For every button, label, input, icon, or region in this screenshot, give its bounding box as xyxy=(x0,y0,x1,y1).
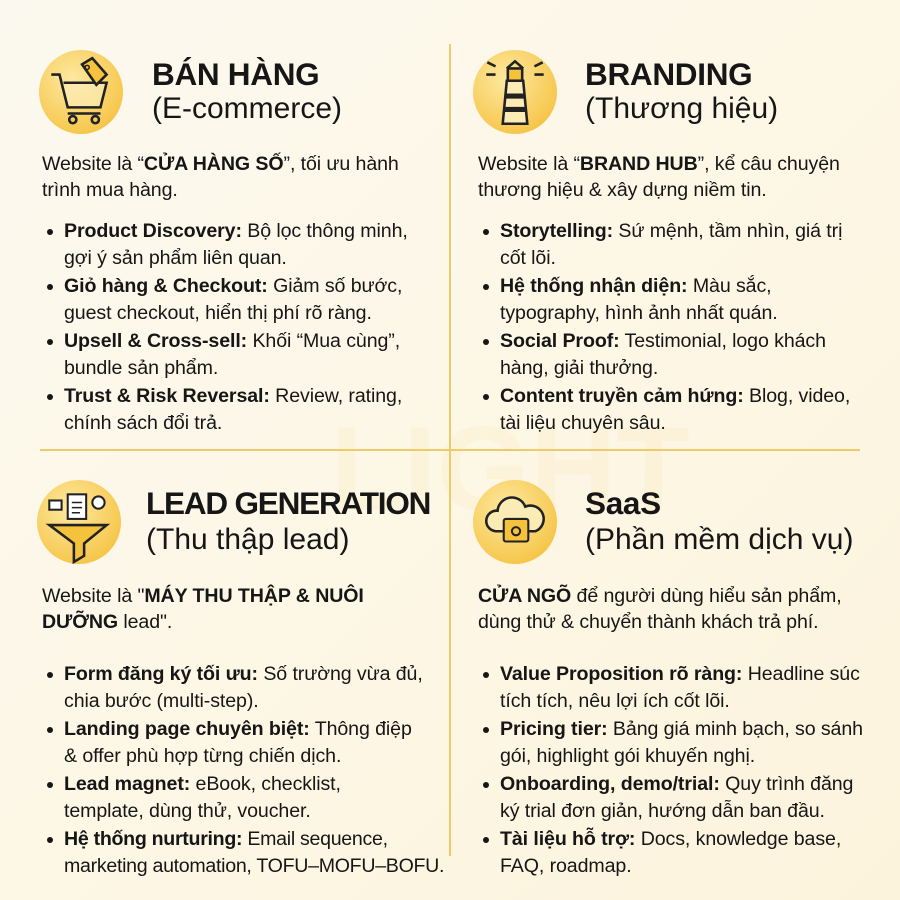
bullet list: Tài liệu hỗ trợ: Docs, knowledge base, xyxy=(500,828,841,850)
bullet list: cốt lõi. xyxy=(500,246,556,268)
bullet list: bundle sản phẩm. xyxy=(64,356,218,378)
bullet list: hàng, giải thưởng. xyxy=(500,356,658,378)
icon: lighthouse xyxy=(473,50,557,134)
watermark: LIGHT xyxy=(330,402,690,536)
bullet list xyxy=(483,220,850,434)
panel: saas xyxy=(473,480,863,876)
intro: CỬA NGÕ để người dùng hiểu sản phẩm, xyxy=(478,585,842,607)
bullet list: chia bước (multi-step). xyxy=(64,690,259,712)
bullet list: Onboarding, demo/trial: Quy trình đăng xyxy=(500,773,853,795)
intro xyxy=(42,584,364,633)
bullet list: Value Proposition rõ ràng: Headline súc xyxy=(500,663,860,685)
bullet list: Pricing tier: Bảng giá minh bạch, so sánh xyxy=(500,718,863,740)
intro xyxy=(478,153,840,201)
title: SaaS xyxy=(585,485,661,521)
intro: thương hiệu & xây dựng niềm tin. xyxy=(478,179,767,201)
bullet list xyxy=(483,663,863,876)
vertical divider xyxy=(449,44,451,856)
panel: ban hang xyxy=(39,50,408,434)
intro: dùng thử & chuyển thành khách trả phí. xyxy=(478,611,818,633)
bullet list: Landing page chuyên biệt: Thông điệp xyxy=(64,718,412,740)
title: LEAD GENERATION xyxy=(146,485,430,521)
bullet list: Giỏ hàng & Checkout: Giảm số bước, xyxy=(64,275,402,297)
bullet list: chính sách đổi trả. xyxy=(64,412,222,434)
bullet list: Content truyền cảm hứng: Blog, video, xyxy=(500,385,850,407)
title: BÁN HÀNG xyxy=(152,56,319,92)
bullet list xyxy=(47,663,444,876)
panel: lead generation xyxy=(37,480,444,876)
bullet list: Hệ thống nurturing: Email sequence, xyxy=(64,828,388,850)
panel: branding xyxy=(473,50,850,434)
icon: cloud xyxy=(473,480,557,564)
intro: Website là “CỬA HÀNG SỐ”, tối ưu hành xyxy=(42,153,399,175)
bullet list: Hệ thống nhận diện: Màu sắc, xyxy=(500,275,772,297)
horizontal divider xyxy=(40,449,860,451)
bullet list: tài liệu chuyên sâu. xyxy=(500,412,666,434)
subtitle: (Phần mềm dịch vụ) xyxy=(585,523,853,556)
bullet list: ký trial đơn giản, hướng dẫn ban đầu. xyxy=(500,800,825,822)
bullet list: Product Discovery: Bộ lọc thông minh, xyxy=(64,220,408,242)
bullet list: Storytelling: Sứ mệnh, tầm nhìn, giá trị xyxy=(500,220,842,242)
subtitle: (Thương hiệu) xyxy=(585,92,778,125)
icon: cart xyxy=(39,50,123,134)
bullet list: typography, hình ảnh nhất quán. xyxy=(500,302,778,324)
intro: Website là "MÁY THU THẬP & NUÔI xyxy=(42,585,364,607)
bullet list: marketing automation, TOFU–MOFU–BOFU. xyxy=(64,854,444,876)
bullet list: template, dùng thử, voucher. xyxy=(64,800,311,822)
bullet list: & offer phù hợp từng chiến dịch. xyxy=(64,744,341,766)
bullet list: Upsell & Cross-sell: Khối “Mua cùng”, xyxy=(64,330,400,352)
intro xyxy=(478,584,842,633)
bullet list: Trust & Risk Reversal: Review, rating, xyxy=(64,385,402,407)
bullet list: Form đăng ký tối ưu: Số trường vừa đủ, xyxy=(64,663,423,685)
intro: DƯỠNG lead". xyxy=(42,611,172,633)
bullet list xyxy=(47,220,408,434)
bullet list: Lead magnet: eBook, checklist, xyxy=(64,773,341,795)
bullet list: FAQ, roadmap. xyxy=(500,854,632,876)
intro: Website là “BRAND HUB”, kể câu chuyện xyxy=(478,153,840,175)
bullet list: tích tích, nêu lợi ích cốt lõi. xyxy=(500,690,730,712)
bullet list: gợi ý sản phẩm liên quan. xyxy=(64,246,287,268)
bullet list: guest checkout, hiển thị phí rõ ràng. xyxy=(64,302,372,324)
intro: trình mua hàng. xyxy=(42,179,178,201)
bullet list: Social Proof: Testimonial, logo khách xyxy=(500,330,826,352)
bullet list: gói, highlight gói khuyến nghị. xyxy=(500,744,755,766)
subtitle: (Thu thập lead) xyxy=(146,523,349,556)
icon: funnel xyxy=(37,480,121,564)
intro xyxy=(42,152,399,201)
title: BRANDING xyxy=(585,56,752,92)
subtitle: (E-commerce) xyxy=(152,92,342,125)
